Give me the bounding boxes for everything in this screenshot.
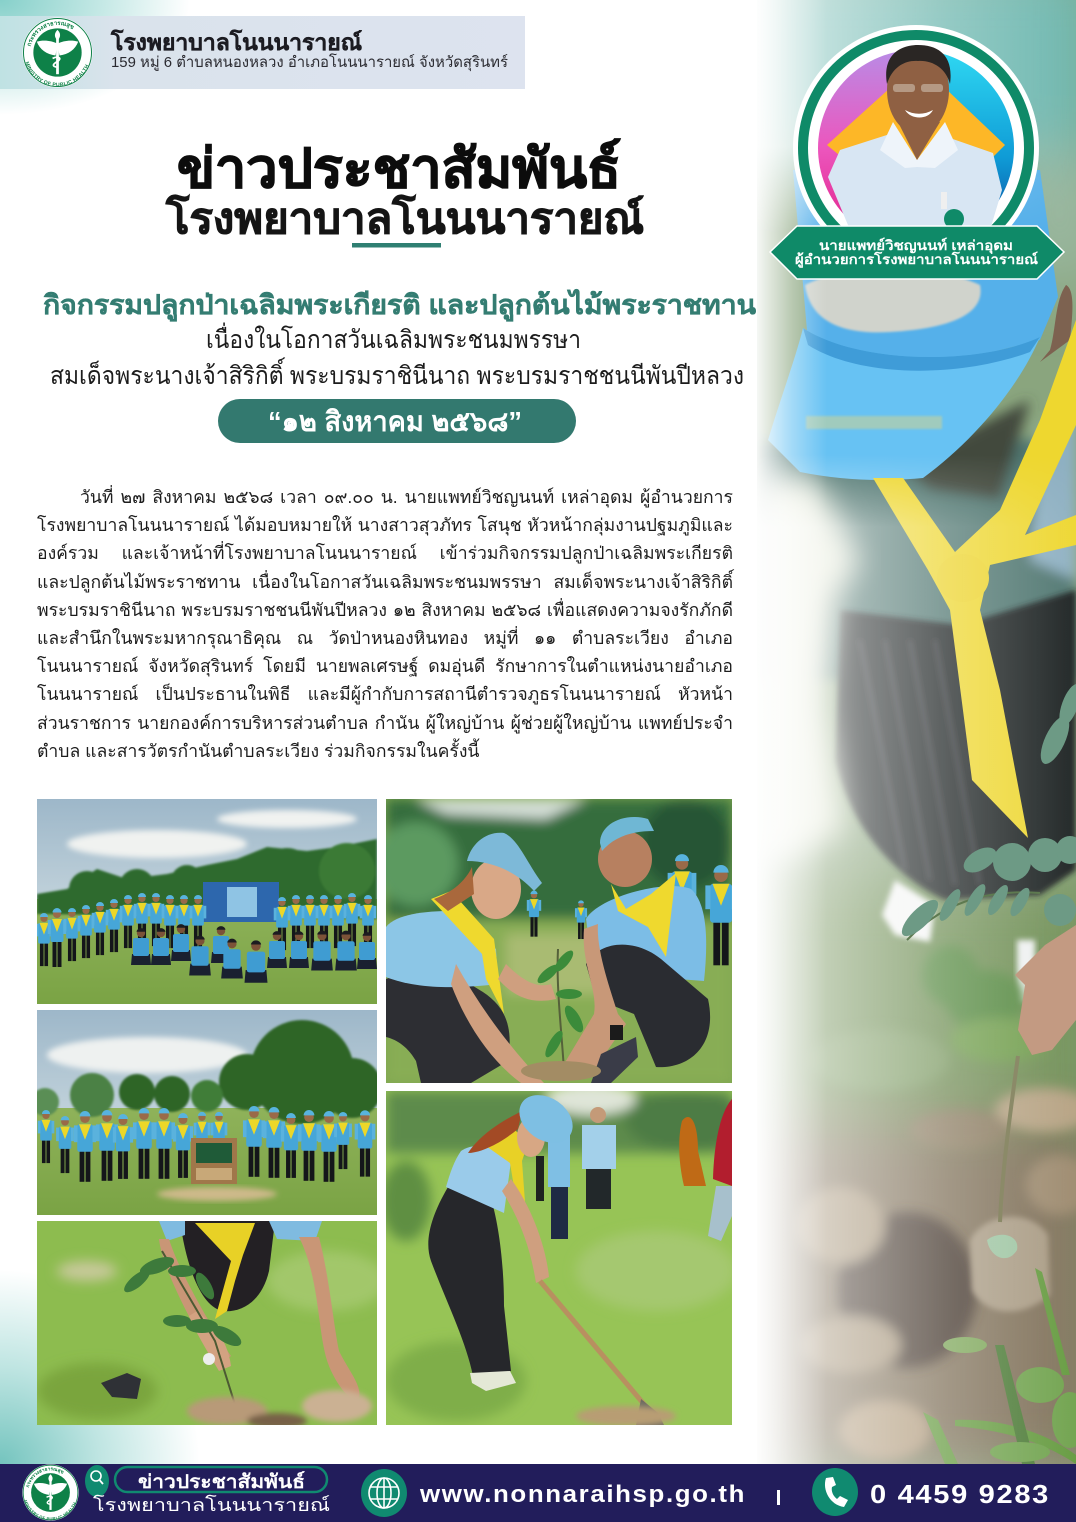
yellow neckerchief bbox=[873, 320, 1076, 838]
news body text: โนนนารายณ์ จังหวัดสุรินทร์ โดยมี นายพลเศรษฐ์ ดมอุ่นดี รักษาการในตำแหน่งนายอำเภอ bbox=[37, 656, 733, 676]
sapling bbox=[535, 948, 587, 1071]
title: โรงพยาบาลโนนนารายณ์ bbox=[165, 194, 644, 242]
date pill bbox=[218, 399, 576, 443]
photo: group portrait with banner bbox=[37, 799, 377, 1004]
hospital address: 159 หมู่ 6 ตำบลหนองหลวง อำเภอโนนนารายณ์ จังหวัดสุรินทร์ bbox=[111, 53, 508, 72]
news body text: พระบรมราชินีนาถ พระบรมราชชนนีพันปีหลวง ๑๒ สิงหาคม ๒๕๖๘ เพื่อแสดงความจงรักภักดี bbox=[37, 600, 733, 620]
bystanders bbox=[536, 1099, 732, 1241]
news body text: และปลูกต้นไม้พระราชทาน เนื่องในโอกาสวันเฉลิมพระชนมพรรษา สมเด็จพระนางเจ้าสิริกิติ์ bbox=[37, 572, 733, 592]
footer bar bbox=[0, 1464, 1076, 1522]
photo: group portrait with sign bbox=[37, 1010, 377, 1215]
man at right bbox=[561, 817, 710, 1083]
phone icon bbox=[812, 1468, 858, 1516]
occasion line 2: สมเด็จพระนางเจ้าสิริกิติ์ พระบรมราชินีนาถ พระบรมราชชนนีพันปีหลวง bbox=[50, 357, 744, 390]
name ribbon: นายแพทย์วิชญนนท์ เหล่าอุดม bbox=[819, 237, 1013, 254]
trousers bbox=[835, 590, 1076, 900]
grass blades bbox=[923, 1268, 1076, 1464]
background photo: tree planting close-up bbox=[757, 0, 1076, 1464]
sapling bbox=[897, 682, 1076, 1222]
photo: woman digging with a hoe bbox=[386, 1091, 732, 1425]
cap bbox=[768, 170, 1072, 480]
news body text: ตำบล และสารวัตรกำนันตำบลระเวียง ร่วมกิจกรรมในครั้งนี้ bbox=[37, 741, 479, 761]
date pill: “๑๒ สิงหาคม ๒๕๖๘” bbox=[268, 406, 522, 437]
shoes and hand bbox=[882, 880, 1035, 1002]
woman with hoe bbox=[428, 1085, 664, 1425]
woman at left bbox=[386, 833, 556, 1083]
name ribbon: ผู้อำนวยการโรงพยาบาลโนนนารายณ์ bbox=[795, 250, 1039, 268]
footer hospital name: โรงพยาบาลโนนนารายณ์ bbox=[93, 1494, 330, 1515]
shirt bbox=[757, 400, 1076, 680]
root ball bbox=[970, 1217, 1050, 1311]
news body text: โนนนารายณ์ เป็นประธานในพิธี และมีผู้กำกับการสถานีตำรวจภูธรโนนนารายณ์ หัวหน้า bbox=[37, 684, 733, 704]
photo: hands planting a sapling bbox=[37, 1221, 377, 1425]
hospital name: โรงพยาบาลโนนนารายณ์ bbox=[110, 29, 362, 55]
background: top-left teal corner bbox=[0, 0, 190, 115]
portrait figure bbox=[827, 45, 1005, 230]
title bbox=[165, 138, 644, 248]
news body text: วันที่ ๒๗ สิงหาคม ๒๕๖๘ เวลา ๐๙.๐๐ น. นายแพทย์วิชญนนท์ เหล่าอุดม ผู้อำนวยการ bbox=[80, 487, 733, 507]
news body text: และสำนึกในพระมหากรุณาธิคุณ ณ วัดป่าหนองหินทอง หมู่ที่ ๑๑ ตำบลระเวียง อำเภอ bbox=[37, 628, 733, 648]
header band bbox=[0, 16, 525, 89]
soil bbox=[796, 1088, 1076, 1460]
news body text: องค์รวม และเจ้าหน้าที่โรงพยาบาลโนนนารายณ์ เข้าร่วมกิจกรรมปลูกป่าเฉลิมพระเกียรติ bbox=[37, 543, 733, 563]
activity heading: กิจกรรมปลูกป่าเฉลิมพระเกียรติ และปลูกต้นไม้พระราชทาน bbox=[43, 289, 757, 322]
photo: two staff planting together bbox=[386, 799, 732, 1083]
website url: www.nonnaraihsp.go.th bbox=[419, 1481, 746, 1508]
separator bbox=[777, 1490, 780, 1505]
pale sleeve bbox=[757, 480, 860, 860]
background: bottom-left teal corner bbox=[0, 1270, 200, 1464]
phone number: 0 4459 9283 bbox=[870, 1479, 1050, 1509]
globe icon bbox=[361, 1469, 407, 1517]
side fades bbox=[757, 0, 1076, 1464]
search icon bbox=[85, 1465, 109, 1497]
name ribbon bbox=[770, 226, 1064, 279]
news body text: ส่วนราชการ นายกองค์การบริหารส่วนตำบล กำนัน ผู้ใหญ่บ้าน ผู้ช่วยผู้ใหญ่บ้าน แพทย์ประจำ bbox=[37, 712, 733, 732]
news body text: โรงพยาบาลโนนนารายณ์ ได้มอบหมายให้ นางสาวสุวภัทร โสนุช หัวหน้ากลุ่มงานปฐมภูมิและ bbox=[37, 515, 733, 535]
occasion line 1: เนื่องในโอกาสวันเฉลิมพระชนมพรรษา bbox=[206, 322, 581, 354]
title: ข่าวประชาสัมพันธ์ bbox=[177, 138, 621, 199]
footer pill label: ข่าวประชาสัมพันธ์ bbox=[138, 1471, 305, 1493]
portrait badge: hospital director bbox=[770, 25, 1064, 279]
footer logo bbox=[22, 1464, 79, 1521]
logo: ministry of public health bbox=[22, 17, 93, 88]
hand over the fade bbox=[1015, 925, 1076, 1055]
news body text bbox=[37, 485, 734, 761]
footer pill label bbox=[115, 1467, 327, 1493]
ground plants bbox=[810, 945, 1050, 1090]
